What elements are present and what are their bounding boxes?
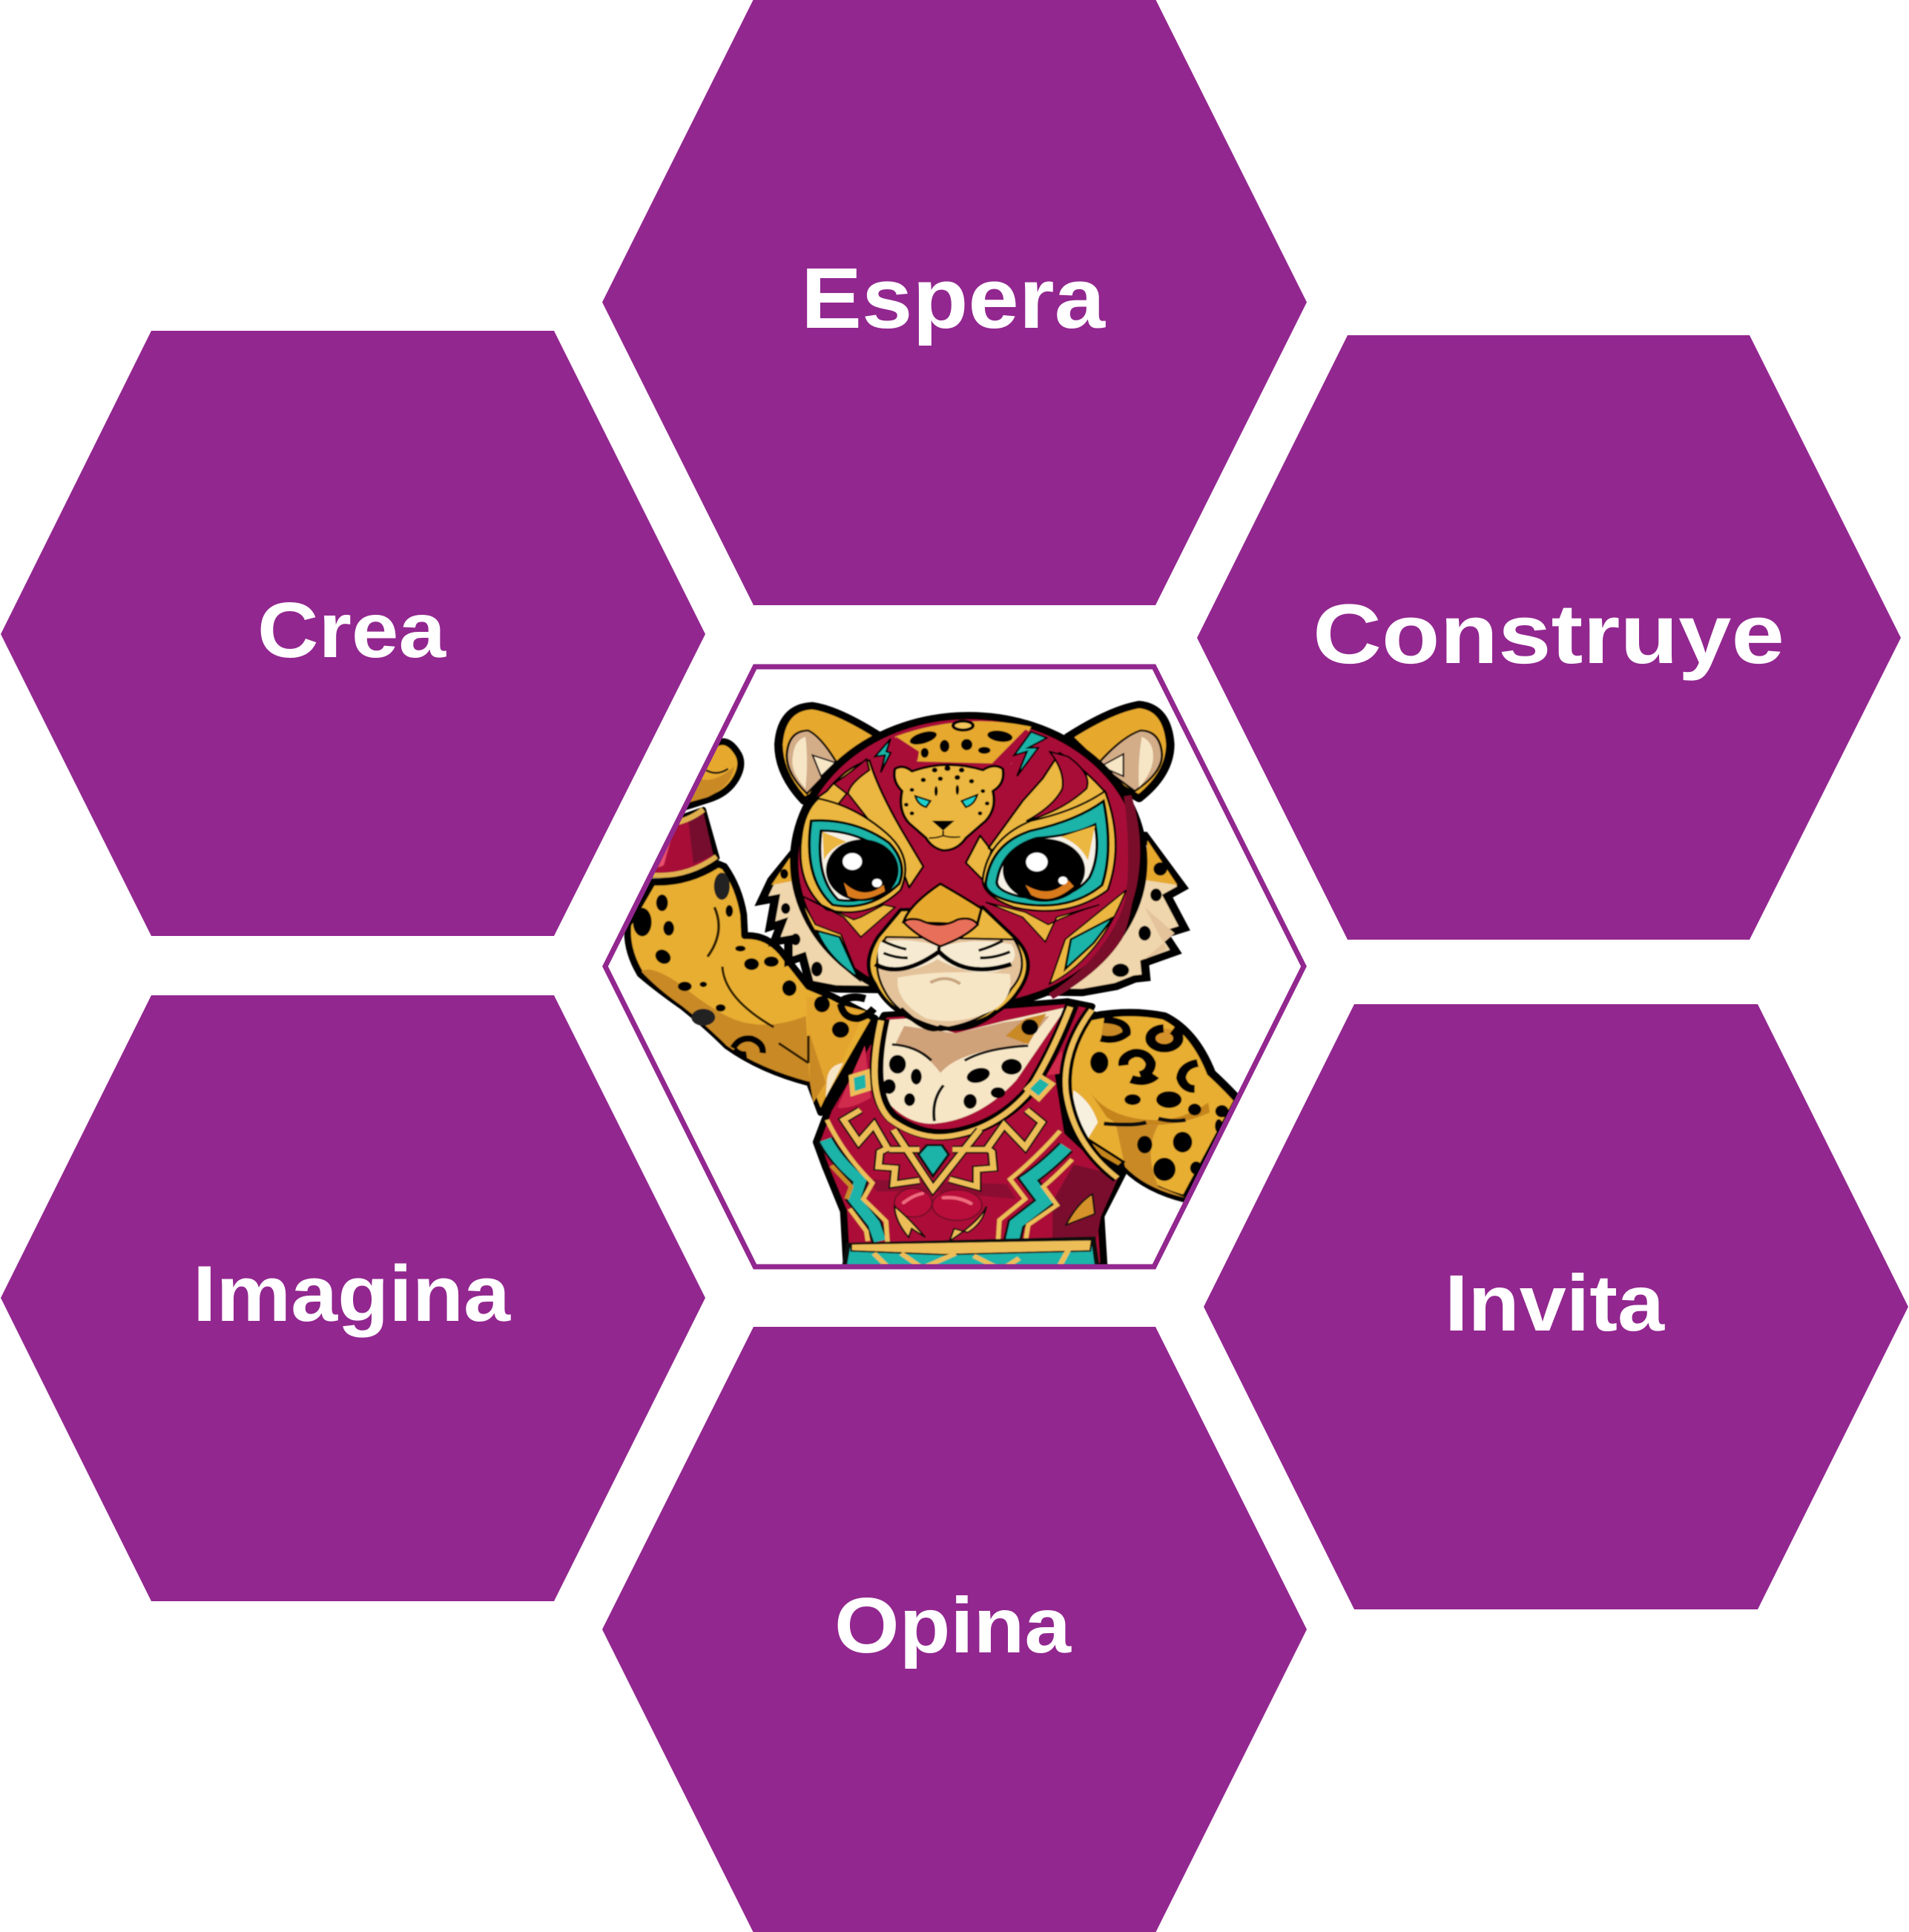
mask base xyxy=(794,716,1144,1007)
side stripes xyxy=(825,1120,1072,1244)
label: Imagina: Imagina xyxy=(193,1249,512,1338)
chest muscles xyxy=(894,1188,932,1217)
label: Crea: Crea xyxy=(257,587,446,674)
hexagon: Espera xyxy=(602,0,1307,605)
belt xyxy=(841,1236,1100,1264)
lower mask panels xyxy=(799,890,1127,984)
center hexagon outline xyxy=(605,667,1304,1267)
eye sockets xyxy=(800,791,1115,912)
mascot: masked jaguar wrestler xyxy=(627,705,1239,1270)
gem xyxy=(918,1145,949,1176)
right arm and torso xyxy=(817,1001,1239,1270)
collar xyxy=(877,1005,1072,1135)
fur ruff xyxy=(762,836,1184,992)
right arm xyxy=(1064,1012,1239,1199)
muzzle and chin xyxy=(868,884,1028,1029)
label: Espera: Espera xyxy=(801,250,1107,346)
greek key pattern xyxy=(844,1110,1042,1189)
ears xyxy=(779,705,1170,801)
wrestling suit xyxy=(817,1001,1124,1270)
neck and chest fur xyxy=(879,1007,1066,1124)
center hexagon with mascot xyxy=(605,667,1304,1270)
small jaguar crest xyxy=(894,765,1003,851)
hexagon: Construye xyxy=(1197,335,1901,940)
hexagon: Imagina xyxy=(1,995,705,1601)
eyes xyxy=(826,839,1085,902)
lightning bolts xyxy=(875,739,891,773)
head xyxy=(762,705,1184,1029)
gold flames xyxy=(813,753,1107,888)
label: Invita: Invita xyxy=(1445,1258,1665,1348)
label: Opina: Opina xyxy=(834,1582,1072,1669)
gold leaf shapes xyxy=(894,1207,926,1237)
hexagon: Opina xyxy=(602,1327,1307,1932)
red flame details xyxy=(834,751,1087,821)
hexagon: Crea xyxy=(1,331,705,936)
label: Construye: Construye xyxy=(1313,587,1784,682)
hexagon: Invita xyxy=(1204,1004,1908,1609)
raised left arm xyxy=(627,742,875,1112)
teal neck squares xyxy=(851,1072,868,1094)
mask top cap xyxy=(892,721,1037,766)
